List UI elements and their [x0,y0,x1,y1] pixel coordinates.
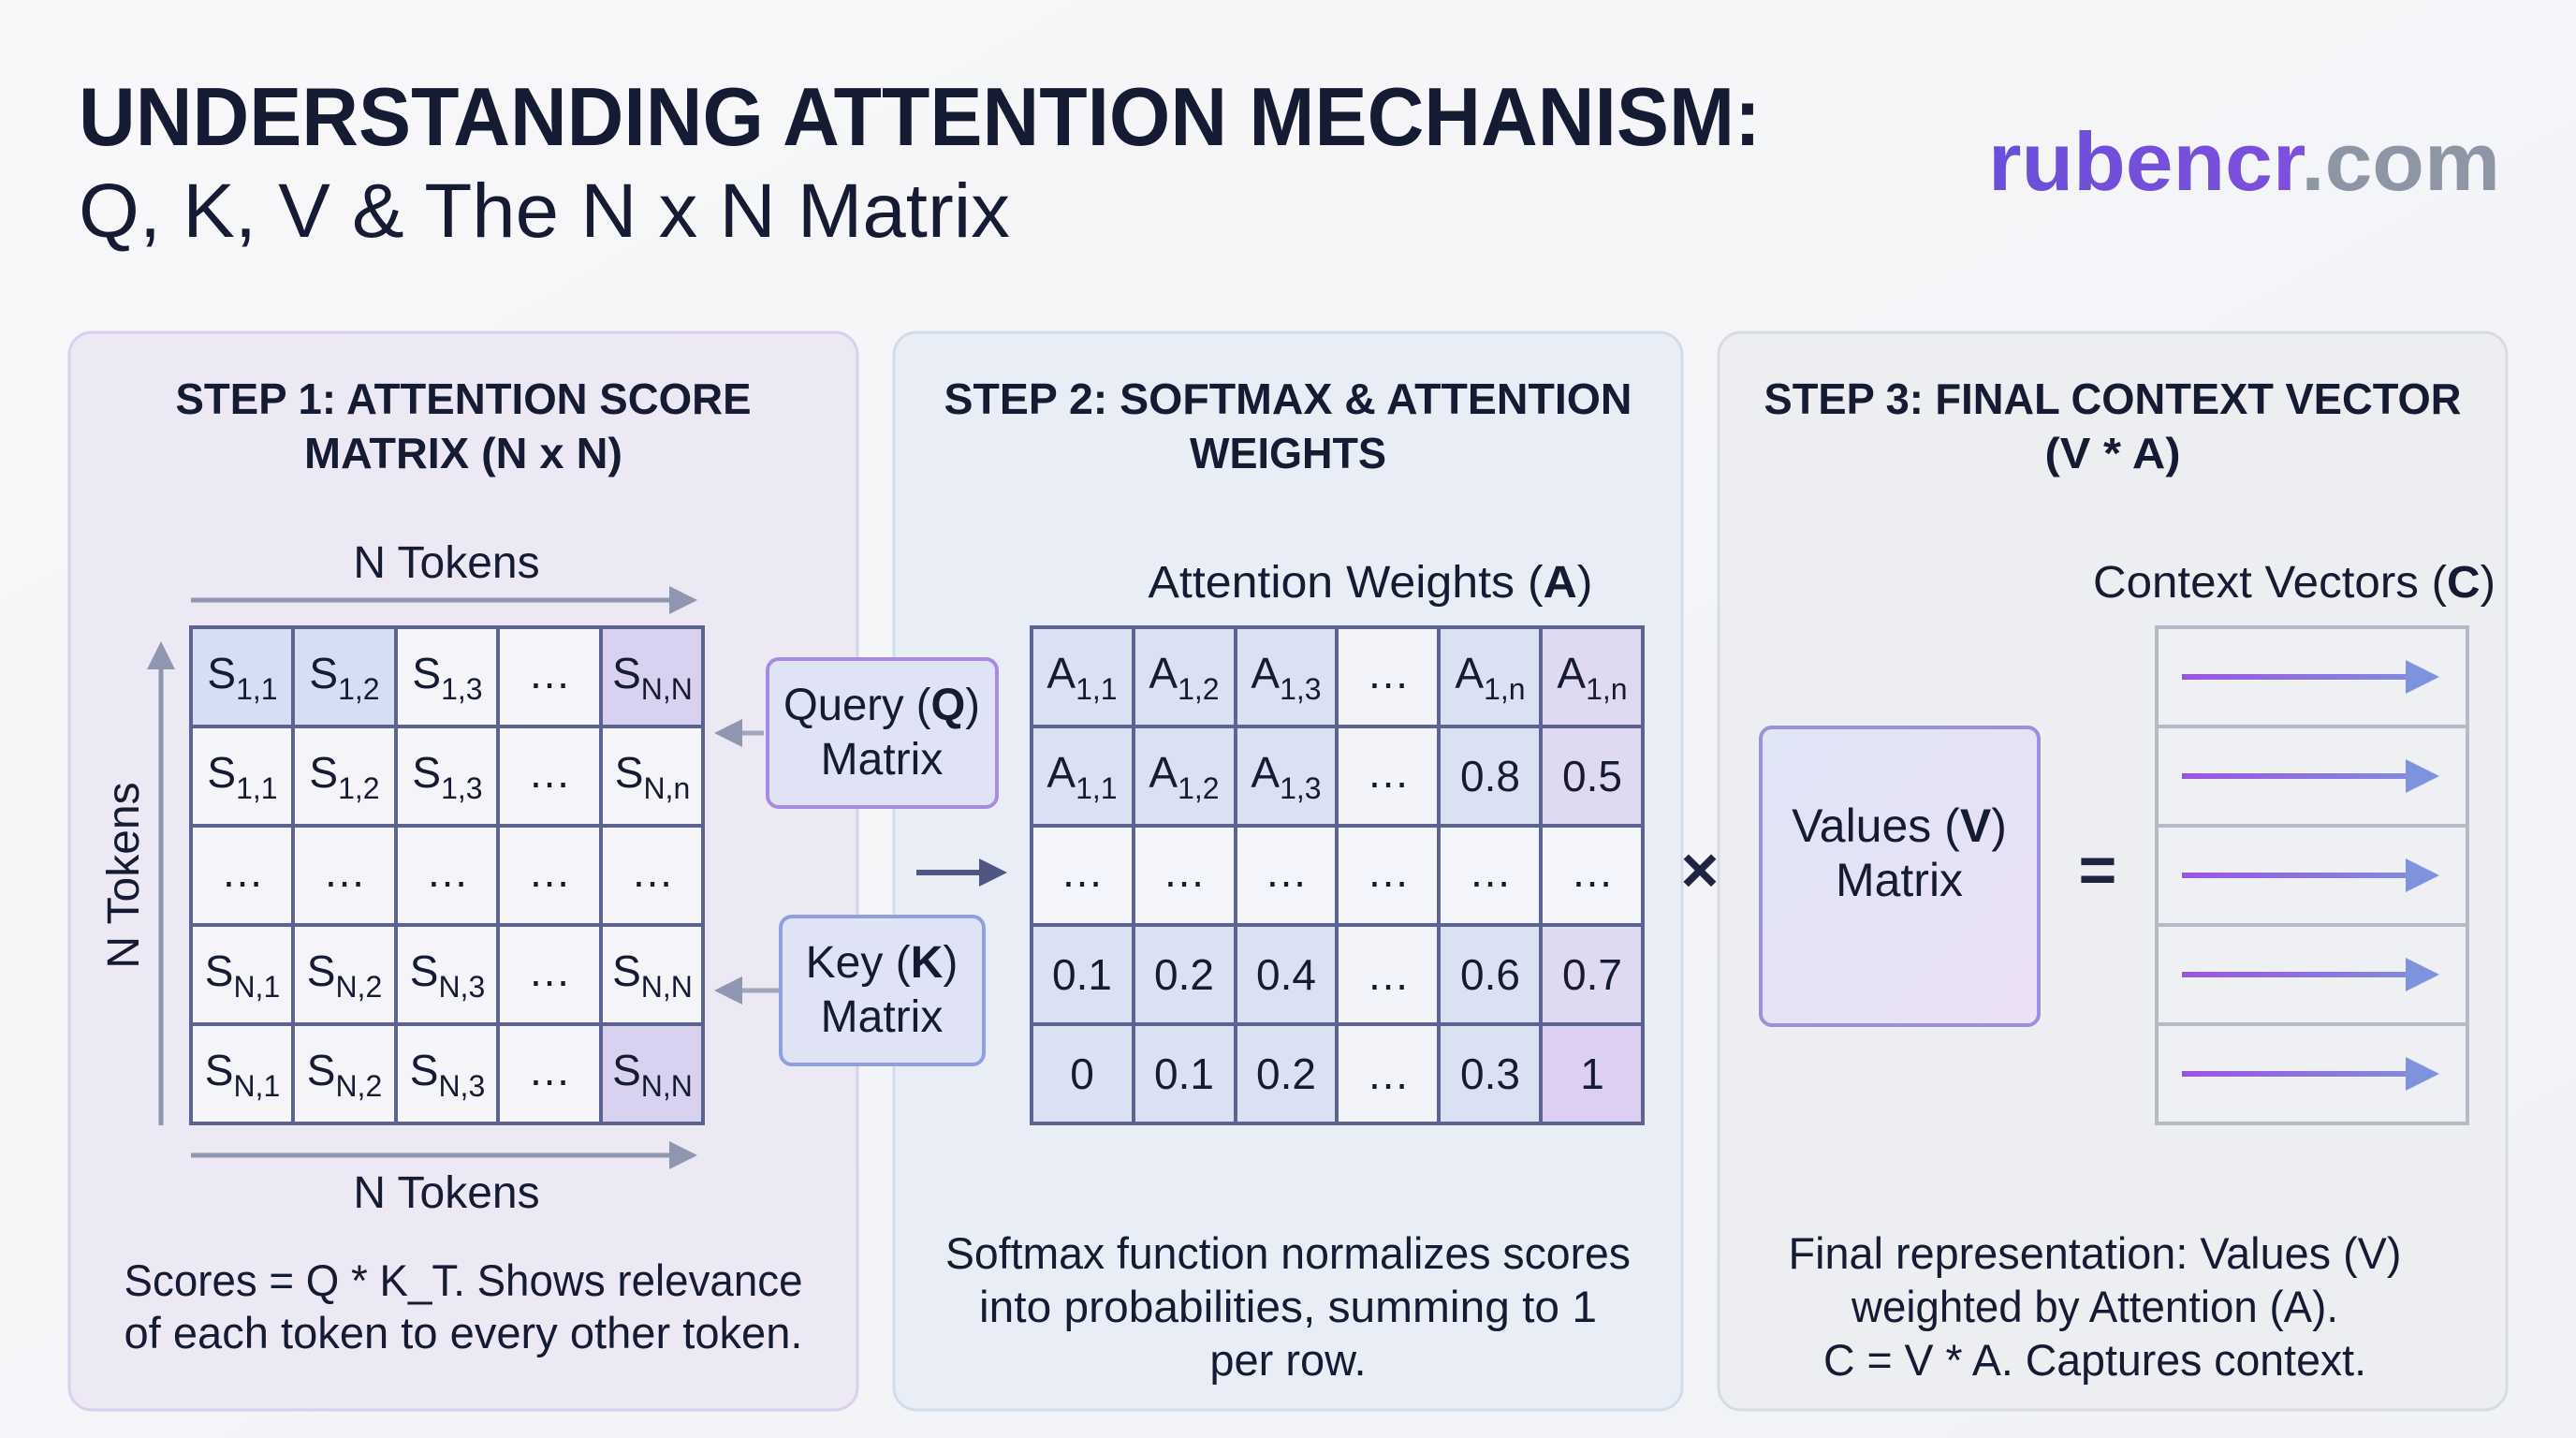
caption step 2: into probabilities, summing to 1 [979,1282,1597,1331]
score matrix: … [528,1046,571,1094]
score matrix: 1,3 [441,771,483,805]
score matrix: N,n [643,771,690,805]
attention matrix: 1,2 [1178,672,1220,706]
attention matrix: 0.7 [1562,950,1622,999]
score matrix: … [528,946,571,995]
panel: step 1 [69,332,857,1410]
score matrix: … [528,847,571,896]
arrow: into step 2 [916,870,1002,875]
attention matrix: 0.8 [1460,752,1520,800]
score matrix: N,2 [335,970,382,1004]
attention matrix: … [1367,847,1410,896]
score matrix: S [412,748,441,797]
key box [781,917,984,1064]
heading step 2: STEP 2: SOFTMAX & ATTENTION [944,374,1632,423]
score matrix: S [307,946,335,995]
attention matrix: A [1046,649,1076,697]
score matrix: S [307,1046,335,1094]
context vector column [2157,627,2467,1123]
attention matrix: 0 [1070,1049,1094,1098]
query box: Query (Q) [783,681,980,730]
caption step 2: Softmax function normalizes scores [945,1228,1631,1278]
caption step 3: weighted by Attention (A). [1851,1282,2338,1331]
score matrix: S [309,748,338,797]
score matrix [191,627,703,1123]
attention matrix: 1 [1580,1049,1604,1098]
operator: multiply: × [1681,833,1719,906]
attention matrix [1032,627,1643,1123]
caption step 2: per row. [1209,1335,1367,1385]
axis label top: N Tokens [353,538,540,588]
values box: Values (V) [1792,800,2007,852]
caption step 3 [1788,1228,2402,1385]
score matrix: … [426,847,469,896]
score matrix: … [631,847,674,896]
attention matrix: … [1367,748,1410,797]
attention matrix: … [1265,847,1308,896]
key box: Matrix [821,992,943,1042]
score matrix: … [221,847,264,896]
query box [768,659,997,807]
score matrix: S [207,748,236,797]
attention matrix: … [1061,847,1104,896]
score matrix: S [612,1046,641,1094]
attention matrix: A [1046,748,1076,797]
heading step 2: WEIGHTS [1190,429,1386,477]
values box: Matrix [1836,854,1963,906]
attention matrix: 0.6 [1460,950,1520,999]
query box: Matrix [821,735,943,785]
title: UNDERSTANDING ATTENTION MECHANISM: [79,70,1761,163]
attention matrix: 1,n [1586,672,1628,706]
heading step 3 [1764,374,2462,477]
score matrix: N,N [641,672,693,706]
axis label bottom: N Tokens [353,1168,540,1218]
attention matrix: 1,3 [1280,771,1322,805]
logo: rubencr.com: rubencr.com [1988,115,2500,208]
heading step 1 [176,374,751,477]
attention matrix: … [1163,847,1206,896]
score matrix: S [612,946,641,995]
title: Q, K, V & The N x N Matrix [79,169,1010,254]
score matrix: S [412,649,441,697]
score matrix: S [205,1046,233,1094]
attention matrix: A [1557,649,1586,697]
attention matrix: 1,1 [1076,771,1118,805]
values box [1761,727,2039,1025]
caption step 3: C = V * A. Captures context. [1823,1335,2366,1385]
score matrix: … [528,748,571,797]
heading step 3: (V * A) [2044,429,2181,477]
attention matrix: 0.1 [1052,950,1112,999]
attention matrix: 0.2 [1154,950,1214,999]
attention matrix: 0.4 [1256,950,1316,999]
score matrix: … [323,847,366,896]
score matrix: N,N [641,970,693,1004]
arrow: key to matrix [719,989,779,992]
score matrix: N,N [641,1069,693,1103]
score matrix: N,2 [335,1069,382,1103]
key box: Key (K) [806,938,958,988]
axis label left: N Tokens [99,782,149,969]
attention matrix: 1,n [1484,672,1526,706]
score matrix: … [528,649,571,697]
score matrix: 1,1 [236,771,278,805]
arrow: query to matrix [719,730,764,736]
score matrix: S [612,649,641,697]
panel: step 2 [894,332,1682,1410]
attention matrix: 1,2 [1178,771,1220,805]
score matrix: S [410,946,438,995]
score matrix: N,3 [438,1069,485,1103]
attention matrix: 0.3 [1460,1049,1520,1098]
score matrix: N,1 [233,1069,280,1103]
caption step 1 [124,1255,803,1357]
score matrix: 1,2 [338,771,380,805]
attention matrix: 0.1 [1154,1049,1214,1098]
attention matrix: A [1251,649,1280,697]
attention matrix: A [1455,649,1484,697]
attention matrix: A [1149,748,1178,797]
heading step 3: STEP 3: FINAL CONTEXT VECTOR [1764,374,2462,423]
score matrix: S [410,1046,438,1094]
caption step 3: Final representation: Values (V) [1788,1228,2402,1278]
heading step 2 [944,374,1632,477]
caption step 1: Scores = Q * K_T. Shows relevance [124,1255,803,1305]
attention matrix: A [1251,748,1280,797]
caption step 1: of each token to every other token. [124,1308,803,1357]
heading step 1: STEP 1: ATTENTION SCORE [176,374,751,423]
operator: equals: = [2079,833,2116,906]
score matrix: N,1 [233,970,280,1004]
attention matrix: … [1367,649,1410,697]
attention matrix: 0.2 [1256,1049,1316,1098]
score matrix: S [205,946,233,995]
score matrix: 1,3 [441,672,483,706]
panel: step 3 [1719,332,2507,1410]
label context vectors: Context Vectors (C) [2093,558,2496,608]
score matrix: 1,1 [236,672,278,706]
score matrix: S [309,649,338,697]
attention matrix: A [1149,649,1178,697]
attention matrix: … [1469,847,1512,896]
heading step 1: MATRIX (N x N) [304,429,622,477]
score matrix: S [207,649,236,697]
attention matrix: … [1367,950,1410,999]
score matrix: S [615,748,643,797]
attention matrix: 1,1 [1076,672,1118,706]
title [79,70,1761,254]
attention matrix: 0.5 [1562,752,1622,800]
caption step 2 [945,1228,1631,1385]
score matrix: N,3 [438,970,485,1004]
score matrix: 1,2 [338,672,380,706]
attention matrix: … [1571,847,1614,896]
label attention weights: Attention Weights ( A) [1148,558,1593,608]
attention matrix: … [1367,1049,1410,1098]
attention matrix: 1,3 [1280,672,1322,706]
